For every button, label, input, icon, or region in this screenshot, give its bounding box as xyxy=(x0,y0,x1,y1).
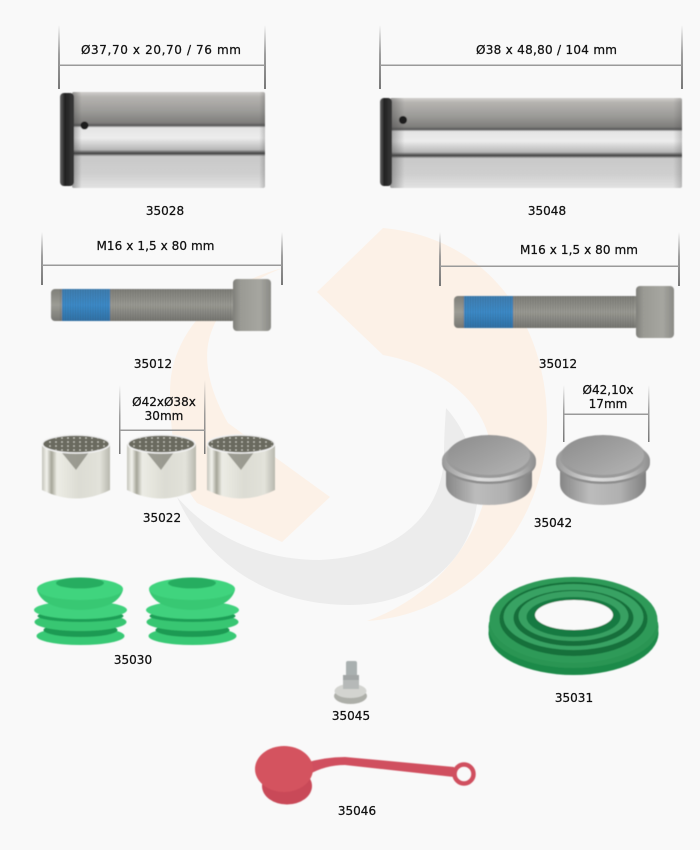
watermark logo xyxy=(170,228,547,621)
bushing 3 xyxy=(207,435,275,498)
dimension: cap xyxy=(563,383,650,442)
bolt xyxy=(454,286,674,338)
label: 35012 left: 35012 xyxy=(134,357,172,371)
part 35012: right bolt xyxy=(439,232,680,371)
label: 35048: 35048 xyxy=(528,204,566,218)
dimension: bushing: 30mm xyxy=(145,409,183,423)
label: 35042: 35042 xyxy=(534,516,572,530)
pin body xyxy=(380,98,682,188)
label: 35030: 35030 xyxy=(114,653,152,667)
part 35031: green seal xyxy=(488,577,658,705)
part 35022: bushings xyxy=(42,380,275,525)
label: 35028: 35028 xyxy=(146,204,184,218)
part 35048: guide pin xyxy=(379,25,683,218)
dimension: cap: 17mm xyxy=(589,397,627,411)
cap 2 xyxy=(556,435,650,505)
part 35046: red cap xyxy=(255,746,474,818)
label: 35012 right: 35012 xyxy=(539,357,577,371)
part 35028: guide pin xyxy=(58,25,266,218)
part 35012: left bolt xyxy=(41,232,283,371)
dimension: bushing xyxy=(119,380,206,454)
dimension: bushing: Ø42xØ38x xyxy=(132,395,196,409)
boot 1 xyxy=(34,578,127,645)
bushing 1 xyxy=(42,435,110,498)
part 35030: green boots xyxy=(34,578,239,667)
label: 35031: 35031 xyxy=(555,691,593,705)
boot 2 xyxy=(146,578,239,645)
bolt xyxy=(51,279,271,331)
part 35042: caps xyxy=(442,383,650,530)
screw xyxy=(334,661,367,704)
dimension: right bolt: M16 x 1,5 x 80 mm xyxy=(520,243,638,257)
seal ring xyxy=(488,577,658,675)
pin body xyxy=(60,92,265,188)
dimension: cap: Ø42,10x xyxy=(583,383,633,397)
red cap with strap xyxy=(255,746,474,804)
dimension: 35028: Ø37,70 x 20,70 / 76 mm xyxy=(81,43,241,57)
label: 35045: 35045 xyxy=(332,709,370,723)
dimension: 35048: Ø38 x 48,80 / 104 mm xyxy=(476,43,617,57)
dimension: left bolt: M16 x 1,5 x 80 mm xyxy=(96,239,214,253)
label: 35046: 35046 xyxy=(338,804,376,818)
bushing 2 xyxy=(127,435,196,498)
cap 1 xyxy=(442,435,536,505)
part 35045: screw xyxy=(332,661,370,723)
label: 35022: 35022 xyxy=(143,511,181,525)
